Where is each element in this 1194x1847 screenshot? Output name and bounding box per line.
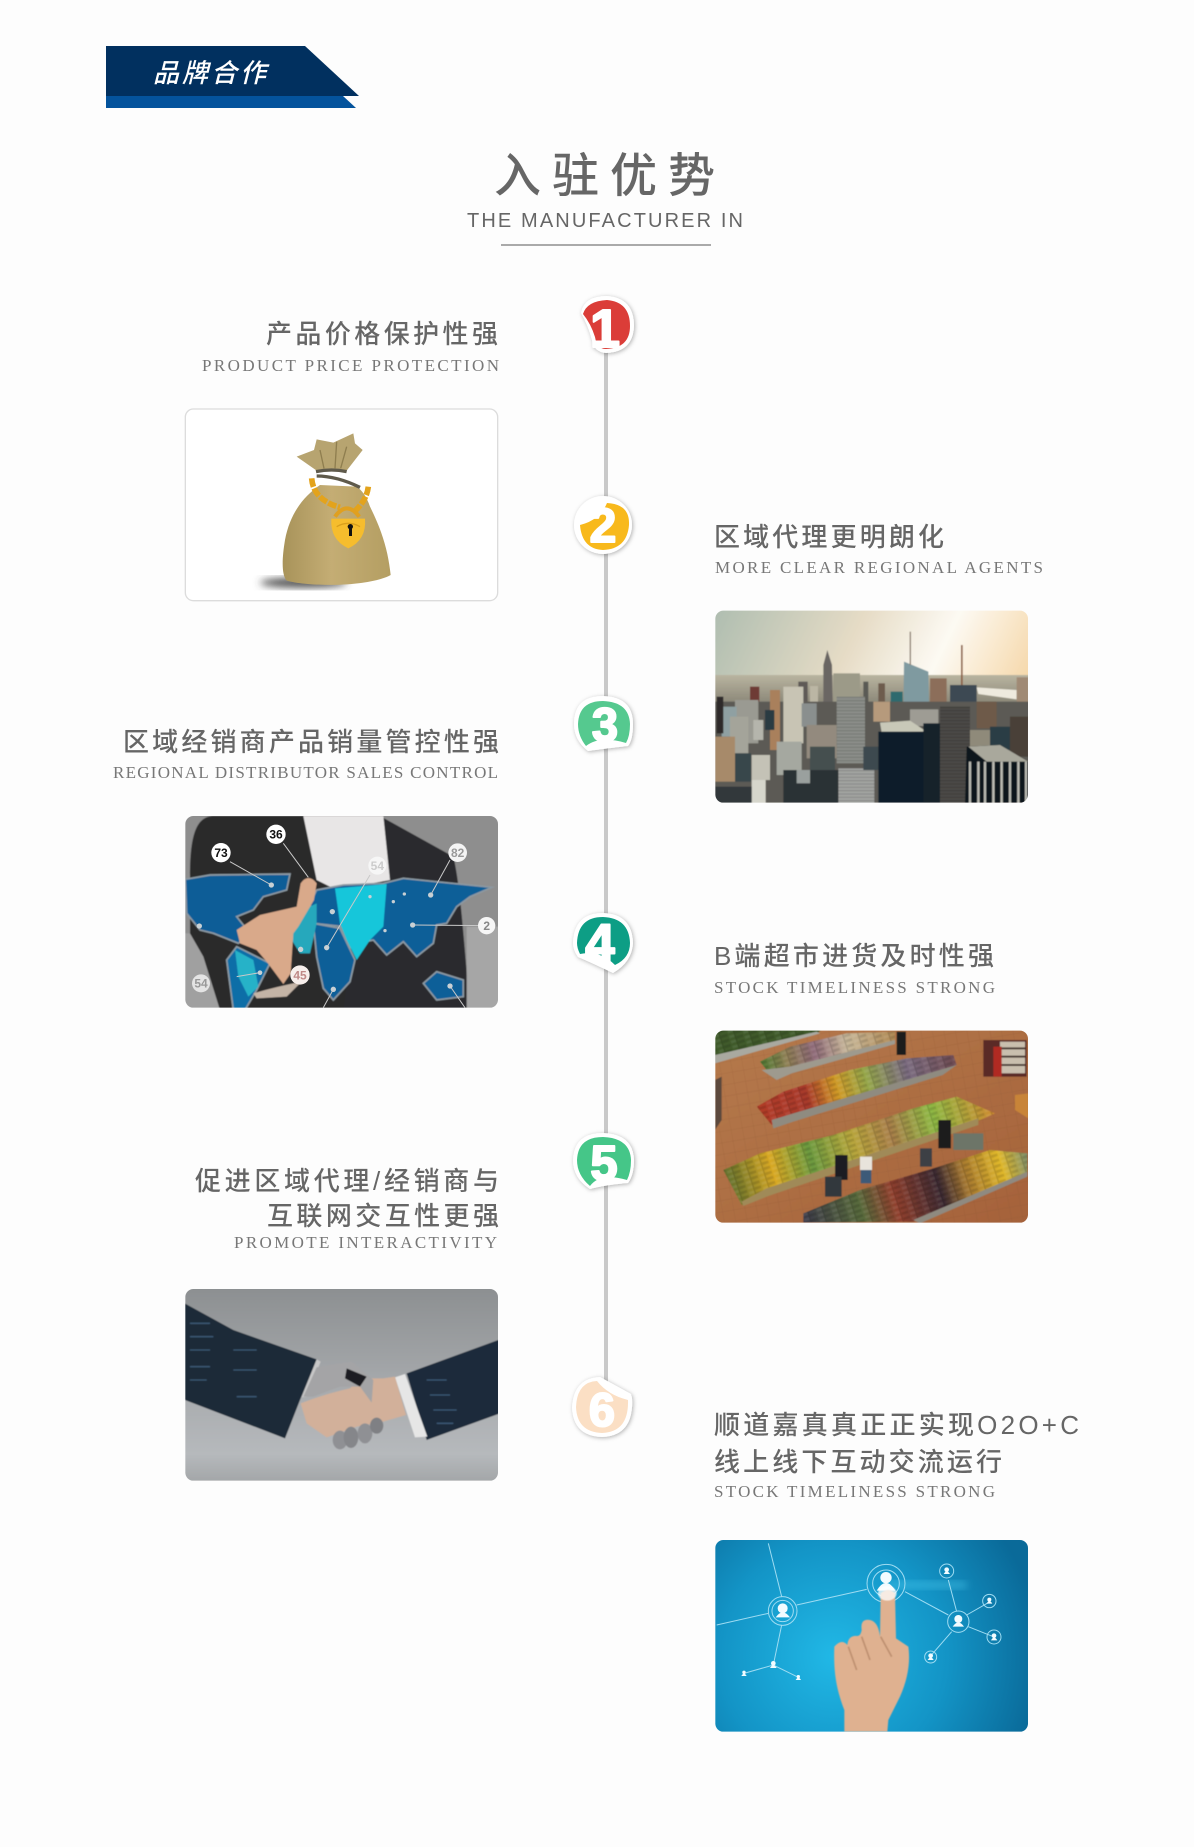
- subheading 1: PRODUCT PRICE PROTECTION: [202, 356, 499, 375]
- panel 5: interactivity: [183, 1166, 500, 1483]
- hand: [834, 1590, 909, 1732]
- numeral 6: 6: [589, 1383, 615, 1436]
- map value 54 bottom: [192, 974, 210, 992]
- map value 2: 2: [483, 919, 490, 933]
- image: supermarket produce aisles: [713, 1028, 1030, 1225]
- heading 5 line 2: 互联网交互性更强: [267, 1201, 499, 1231]
- badge 3: [574, 696, 633, 751]
- map value 82: [448, 843, 467, 862]
- map value 36: 36: [269, 828, 283, 842]
- panel 4: stock timeliness: [713, 941, 1030, 1225]
- title: 入驻优势: [494, 149, 715, 202]
- title underline: [501, 244, 711, 246]
- banner: 品牌合作: [106, 46, 359, 108]
- image: businessman touching world map: [183, 813, 500, 1010]
- panel 2: regional agents: [713, 522, 1043, 805]
- panel 6: O2O+C: [713, 1410, 1079, 1735]
- map value 54 top: [368, 857, 386, 875]
- timeline line: [604, 340, 608, 1390]
- heading 1: 产品价格保护性强: [266, 319, 498, 349]
- image: money bag with padlock: [185, 409, 498, 601]
- banner text: 品牌合作: [153, 58, 270, 88]
- panel 3: sales control: [113, 727, 500, 1010]
- map value 54 top: 54: [371, 859, 384, 873]
- numeral 2: 2: [590, 500, 616, 553]
- badge 6: [572, 1377, 632, 1437]
- badge 2: [574, 496, 632, 554]
- heading 6 line 1: 顺道嘉真真正正实现O2O+C: [714, 1410, 1079, 1440]
- subheading 4: STOCK TIMELINESS STRONG: [714, 978, 995, 997]
- image: city skyline: [713, 608, 1030, 805]
- heading 4: B端超市进货及时性强: [714, 941, 994, 971]
- map value 45: [290, 965, 310, 985]
- map value 82: 82: [451, 846, 465, 860]
- map value 2: [478, 917, 495, 934]
- heading 3: 区域经销商产品销量管控性强: [123, 727, 499, 757]
- subheading 5: PROMOTE INTERACTIVITY: [234, 1233, 497, 1252]
- map value 73: [211, 843, 231, 862]
- numeral 4: 4: [585, 914, 615, 973]
- english subtitle: THE MANUFACTURER IN: [467, 210, 743, 232]
- heading 5 line 1: 促进区域代理/经销商与: [195, 1166, 499, 1196]
- image: human and robot handshake: [183, 1287, 500, 1483]
- heading 6 line 2: 线上线下互动交流运行: [714, 1447, 1002, 1477]
- subheading 3: REGIONAL DISTRIBUTOR SALES CONTROL: [113, 763, 498, 782]
- numeral 5: 5: [590, 1137, 618, 1191]
- badge 4: [573, 913, 633, 973]
- title block: [467, 149, 743, 246]
- heading 2: 区域代理更明朗化: [714, 522, 944, 552]
- person icons: [741, 1567, 997, 1680]
- image: finger touching social network: [713, 1538, 1030, 1735]
- numeral 3: 3: [592, 698, 618, 751]
- badge 1: [581, 296, 634, 359]
- map value 45: 45: [293, 968, 307, 982]
- numeral 1: 1: [590, 299, 620, 359]
- map value 54 bottom: 54: [194, 977, 208, 991]
- badge 5: [573, 1133, 634, 1191]
- subheading 6: STOCK TIMELINESS STRONG: [714, 1482, 995, 1501]
- subheading 2: MORE CLEAR REGIONAL AGENTS: [715, 558, 1043, 577]
- map value 73: 73: [214, 846, 228, 860]
- map value 36: [266, 825, 286, 844]
- panel 1: price protection: [185, 319, 499, 601]
